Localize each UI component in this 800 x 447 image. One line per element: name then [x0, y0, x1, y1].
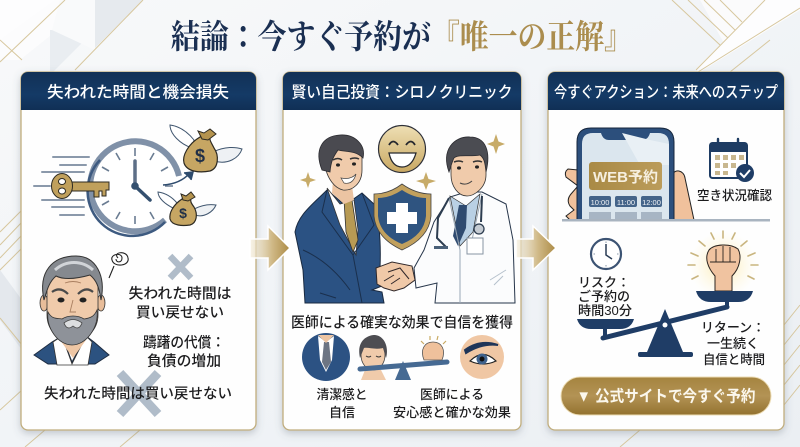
icon: shield with cross: [374, 184, 431, 250]
panel heading: act now: [548, 72, 784, 110]
icon: worried older man: [34, 253, 128, 365]
panel: lost time and opportunity: [21, 72, 256, 430]
icon: large cross mark: [120, 373, 158, 414]
text: lost time summary: 失われた時間は買い戻せない: [44, 386, 232, 402]
text: cost of hesitation: 負債の増加: [147, 352, 221, 370]
text: lost time cannot be bought back: 買い戻せない: [136, 304, 224, 322]
icon: smiling face: [378, 126, 426, 172]
icon: suit badge: [302, 333, 350, 381]
time slots: 11:00: [617, 198, 635, 207]
icon: small cross mark: [170, 256, 191, 278]
time slots: 12:00: [642, 198, 661, 207]
icon: speeding lines: [34, 157, 89, 215]
text: cost of hesitation: [143, 334, 225, 370]
text: cleanliness and confidence: 清潔感と: [316, 387, 368, 402]
icon: tilted balance scale: [577, 291, 753, 357]
icon: calm face: [359, 335, 387, 380]
text: return lifelong confidence: 自信と時間: [703, 352, 765, 367]
icon: flying money bag small: $: [179, 205, 187, 221]
icon: eye badge: [460, 335, 504, 379]
text: cleanliness and confidence: 自信: [329, 405, 355, 420]
text: cleanliness and confidence: [316, 387, 368, 420]
text: reassurance from doctors: 安心感と確かな効果: [393, 405, 511, 420]
text: lost time cannot be bought back: 失われた時間は: [128, 286, 232, 302]
button: web booking: WEB予約: [593, 169, 658, 186]
text: reassurance from doctors: 医師による: [420, 387, 484, 402]
icon: fist with glow: [688, 231, 758, 299]
illustration: businessman: [295, 135, 384, 303]
text: return lifelong confidence: リターン：: [701, 320, 765, 335]
icon: hand holding phone: [565, 128, 694, 220]
arrow: time to money: [163, 172, 193, 185]
icon: flying money bag small: [158, 192, 216, 225]
panel heading: lost time: [21, 72, 256, 110]
time slots: 10:00: [591, 198, 609, 207]
panel: act now: [548, 72, 784, 430]
panel: smart self investment: [283, 72, 521, 430]
divider: [562, 219, 770, 222]
text: cost of hesitation: 躊躇の代償：: [143, 334, 225, 352]
icon: clock: [88, 140, 181, 236]
icon: calendar with check: [710, 139, 754, 182]
icon: sparkles: [300, 134, 505, 190]
text: return lifelong confidence: 一生続く: [707, 336, 759, 351]
title: 結論：今すぐ予約が『唯一の正解』: [171, 19, 633, 56]
text: check availability: 空き状況確認: [697, 188, 772, 203]
icon: gold key: [52, 174, 109, 198]
arrow: panel 2 to panel 3: [516, 226, 556, 270]
illustration: doctor in white coat: [414, 137, 515, 303]
icon: handshake: [376, 262, 415, 291]
text: confidence through medical results: 医師による確実な効果で自信を獲得: [291, 314, 513, 332]
icon: small clock: [591, 239, 621, 269]
panel heading: self investment: 賢い自己投資：シロノクリニック: [292, 84, 512, 102]
arrow: panel 1 to panel 2: [250, 226, 290, 270]
button: book on official site: ▼ 公式サイトで今すぐ予約: [576, 386, 756, 406]
panel heading: lost time: 失われた時間と機会損失: [47, 84, 229, 102]
text: risk 30 minutes: リスク：: [578, 275, 630, 290]
icon: flying money bag large: $: [195, 146, 205, 166]
text: risk 30 minutes: [578, 275, 632, 318]
text: return lifelong confidence: [701, 320, 765, 367]
icon: flying money bag large: [170, 125, 242, 172]
text: risk 30 minutes: 時間30分: [578, 303, 632, 318]
icon: balance scale small: [360, 336, 447, 380]
text: lost time cannot be bought back: [128, 286, 232, 322]
text: reassurance from doctors: [393, 387, 511, 420]
time slots: [589, 196, 662, 220]
button: book on official site: [561, 377, 771, 415]
text: risk 30 minutes: ご予約の: [578, 289, 630, 304]
panel heading: self investment: [283, 72, 521, 110]
